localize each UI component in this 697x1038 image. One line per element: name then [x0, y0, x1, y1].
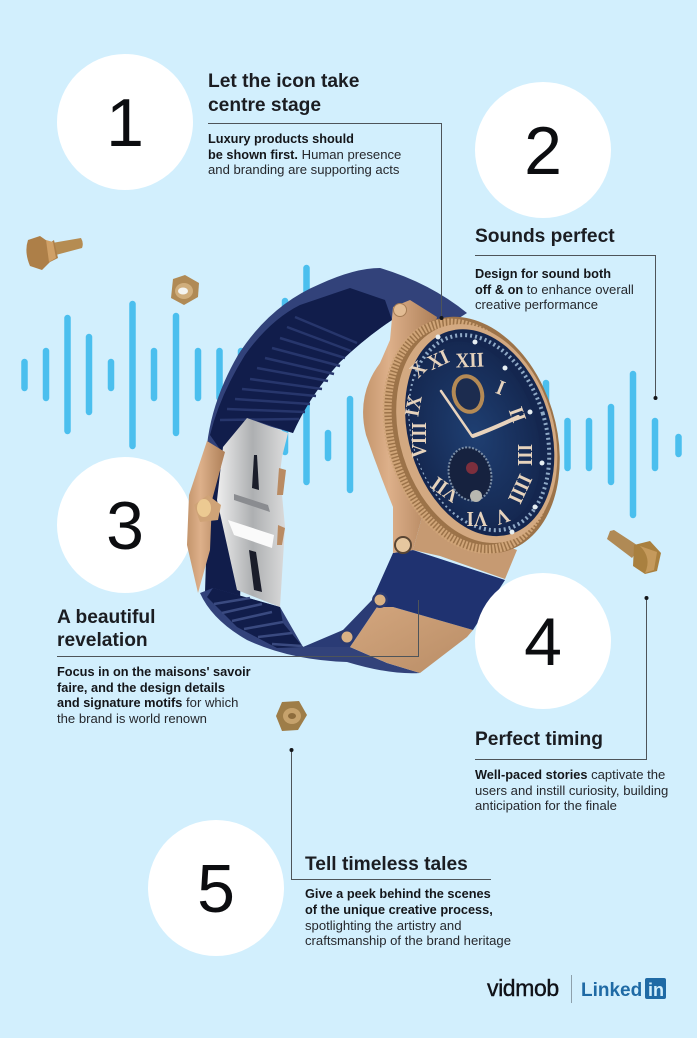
text block 3: Focus in on the maisons' savoir: [57, 664, 251, 679]
clasp backing: [205, 450, 245, 600]
text block 3: [57, 607, 251, 726]
connector dots: [290, 316, 658, 752]
logo: LinkedIn: [581, 978, 666, 1001]
logo: vidmob: vidmob: [487, 975, 559, 1001]
upper strap: [207, 268, 467, 455]
dial numerals: V: [491, 503, 513, 529]
text block 5: [305, 854, 511, 948]
text block 2: Sounds perfect: [475, 226, 615, 247]
text block 2: Design for sound both: [475, 266, 611, 281]
text block 4: [475, 729, 668, 813]
dial numerals: IX: [401, 393, 427, 418]
circle 4: [475, 573, 611, 709]
sound wave bars: [24, 268, 678, 515]
logo divider: [570, 975, 572, 1003]
circle 5: [148, 820, 284, 956]
circle 2: 2: [524, 113, 562, 189]
text block 1: and branding are supporting acts: [208, 162, 400, 177]
dial numerals: II: [504, 404, 530, 426]
text block 4: anticipation for the finale: [475, 798, 617, 813]
text block 5: Give a peek behind the scenes: [305, 886, 491, 901]
lower strap ribs: [207, 588, 303, 648]
text block 1: [208, 71, 401, 177]
bolt top left: [26, 236, 83, 270]
text block 2: [475, 226, 634, 312]
text block 3: revelation: [57, 630, 148, 651]
gold wedge: [413, 513, 517, 579]
case screws: [394, 304, 411, 553]
dial numerals: VII: [427, 471, 464, 507]
text block 3: and signature motifs for which: [57, 695, 238, 710]
text block 2: creative performance: [475, 297, 598, 312]
dial numerals: VIII: [408, 422, 431, 458]
circle 3: [57, 457, 193, 593]
dial numerals: I: [493, 376, 508, 400]
gold lower lug: [350, 607, 473, 673]
bolt right: [607, 530, 661, 574]
text block 4: Well-paced stories captivate the: [475, 767, 665, 782]
sub dials: [443, 373, 497, 506]
dial numerals: XII: [455, 349, 485, 373]
logo: LinkedIn: Linked: [581, 980, 642, 1001]
blue centre strap: [372, 550, 505, 630]
circle 1: [57, 54, 193, 190]
lower lug screws: [339, 592, 388, 645]
text block 5: Tell timeless tales: [305, 854, 468, 875]
upper strap ribs: [210, 288, 392, 452]
text block 4: users and instill curiosity, building: [475, 783, 668, 798]
text block 3: faire, and the design details: [57, 680, 225, 695]
gold clasp: [187, 441, 286, 593]
dial numerals: X: [406, 356, 432, 383]
circle 3: 3: [106, 488, 144, 564]
text block 5: of the unique creative process,: [305, 902, 493, 917]
text block 5: craftsmanship of the brand heritage: [305, 933, 511, 948]
circle 1: 1: [106, 85, 144, 161]
gold case: [363, 300, 437, 553]
dial numerals: [401, 345, 536, 530]
text block 4: Perfect timing: [475, 729, 603, 750]
lower strap: [200, 588, 420, 673]
dial numerals: IIII: [503, 470, 536, 507]
text block 2: off & on to enhance overall: [475, 282, 634, 297]
silver clasp: [217, 418, 288, 607]
dial numerals: VI: [466, 507, 488, 530]
text block 5: spotlighting the artistry and: [305, 918, 462, 933]
dial numerals: XI: [424, 345, 453, 375]
nut bottom: [276, 701, 307, 731]
circle 2: [475, 82, 611, 218]
circle 5: 5: [197, 851, 235, 927]
dial numerals: III: [513, 444, 536, 466]
connector lines: [57, 124, 656, 880]
watch illustration: [187, 268, 588, 673]
watch hands: [441, 391, 518, 436]
text block 3: the brand is world renown: [57, 711, 207, 726]
circle 4: 4: [524, 604, 562, 680]
text block 1: Let the icon take: [208, 71, 360, 92]
text block 1: be shown first. Human presence: [208, 147, 401, 162]
logo: LinkedIn: in: [648, 980, 664, 1000]
watch bezel: [356, 295, 588, 575]
text block 3: A beautiful: [57, 607, 155, 628]
nut top: [171, 275, 199, 305]
text block 1: centre stage: [208, 95, 321, 116]
dial diamonds: [436, 334, 544, 534]
text block 1: Luxury products should: [208, 131, 354, 146]
